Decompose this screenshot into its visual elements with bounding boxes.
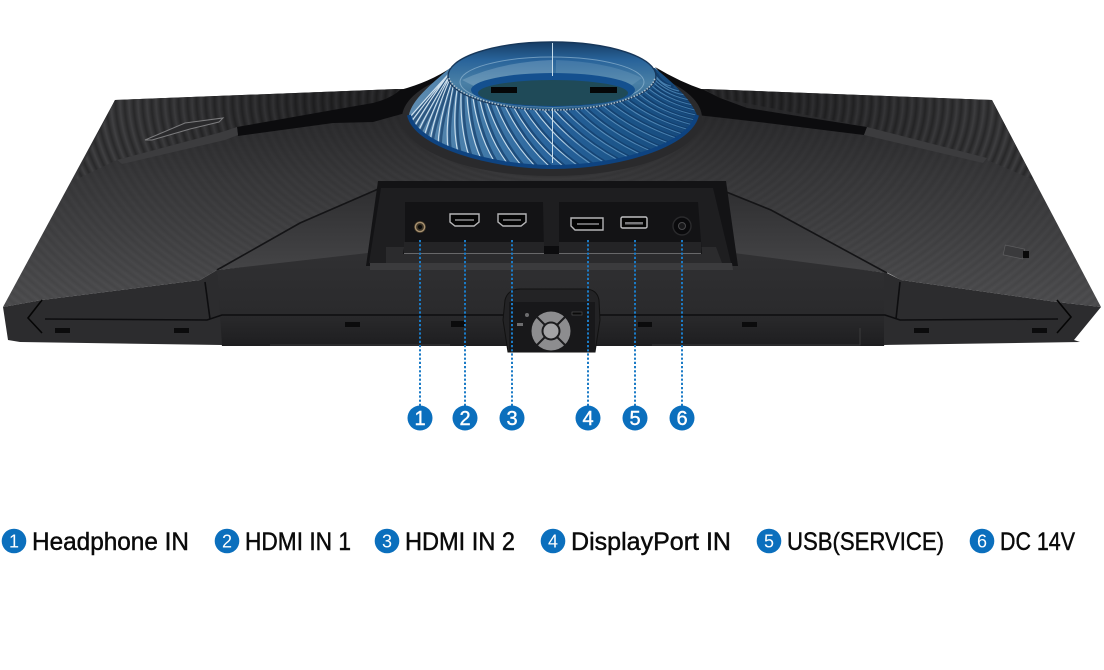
dome rim <box>448 42 656 110</box>
dome opening <box>478 80 628 106</box>
marker 1 <box>408 406 432 430</box>
port: DisplayPort <box>571 218 603 230</box>
left emblem slit <box>145 118 223 140</box>
marker 5: 5 <box>629 408 641 430</box>
monitor back main surface <box>3 89 1101 307</box>
rating plates <box>270 328 860 345</box>
marker 6: 6 <box>676 408 688 430</box>
dome rim ring <box>460 57 644 107</box>
left end cap <box>3 270 222 345</box>
opening dark tabs <box>491 87 617 93</box>
upper right stripe panel <box>704 89 1034 180</box>
hinge <box>544 246 559 254</box>
legend item 1: Headphone IN <box>32 528 189 556</box>
panel: port recess <box>366 181 738 270</box>
dome outer cone <box>409 68 697 167</box>
joystick housing <box>503 289 600 352</box>
legend item 5: 5 <box>764 532 774 552</box>
marker 5 <box>622 406 648 430</box>
front panel <box>509 302 595 352</box>
port: DC power <box>673 217 691 235</box>
panel highlight <box>404 253 701 254</box>
legend item 3: HDMI IN 2 <box>405 528 515 556</box>
legend item 5: USB(SERVICE) <box>787 528 944 556</box>
black shoulder bands <box>237 67 867 136</box>
rim lower edge <box>449 78 655 110</box>
legend <box>2 528 1075 556</box>
dome seam <box>552 43 554 163</box>
marker 1: 1 <box>414 408 426 430</box>
dome collar <box>402 60 702 176</box>
legend item 6 <box>970 528 1075 556</box>
surface texture arcs <box>0 85 1104 310</box>
marker 2 <box>452 406 478 430</box>
legend item 4: DisplayPort IN <box>571 528 731 556</box>
numbered callout markers <box>408 406 694 430</box>
upper panel texture arcs <box>76 89 1033 180</box>
rim glass highlights <box>462 60 642 88</box>
port: HDMI 1 <box>450 214 479 226</box>
marker 6 <box>670 406 694 430</box>
port: HDMI 2 <box>498 214 526 226</box>
recess interior <box>369 188 731 263</box>
port: USB <box>621 217 647 228</box>
dome ribs <box>410 65 698 166</box>
lower seam lines <box>45 282 1058 320</box>
legend item 1: 1 <box>9 532 19 552</box>
opening blue band <box>471 73 635 107</box>
legend item 2: HDMI IN 1 <box>245 528 351 556</box>
legend item 4: 4 <box>548 532 558 552</box>
indicator marks <box>517 312 582 326</box>
wedge creases <box>217 187 887 273</box>
lip <box>370 263 733 270</box>
left corner chevron <box>28 300 42 333</box>
marker 4: 4 <box>582 408 594 430</box>
dome base edge <box>409 115 697 167</box>
callout dotted leader lines <box>420 240 682 406</box>
right port panel <box>559 202 702 254</box>
panel lower bands <box>404 242 701 253</box>
vent slots <box>55 321 1047 333</box>
lower wedges <box>217 187 887 273</box>
marker 3 <box>500 406 524 430</box>
right end cap <box>884 272 1101 345</box>
marker 3: 3 <box>506 408 518 430</box>
recess frame <box>366 181 738 266</box>
lock icon <box>1003 245 1029 259</box>
marker 2: 2 <box>459 408 471 430</box>
blue dome stand base <box>409 42 698 167</box>
lower housing <box>205 253 901 346</box>
legend item 6: DC 14V <box>1000 528 1075 556</box>
right corner chevron <box>1057 300 1071 333</box>
joystick pad <box>532 312 570 350</box>
legend item 6: 6 <box>977 532 987 552</box>
shoulder ridges <box>117 127 987 164</box>
legend item 2: 2 <box>222 532 232 552</box>
housing shell <box>503 289 600 352</box>
panel: monitor rear body <box>0 60 1104 346</box>
upper left stripe panel <box>75 89 400 180</box>
legend item 3: 3 <box>382 532 392 552</box>
left port panel <box>403 202 544 254</box>
marker 4 <box>576 406 600 430</box>
infographic: monitor rear ports <box>2 41 1101 556</box>
inner ledge <box>386 247 722 263</box>
port: headphone jack <box>414 221 426 233</box>
